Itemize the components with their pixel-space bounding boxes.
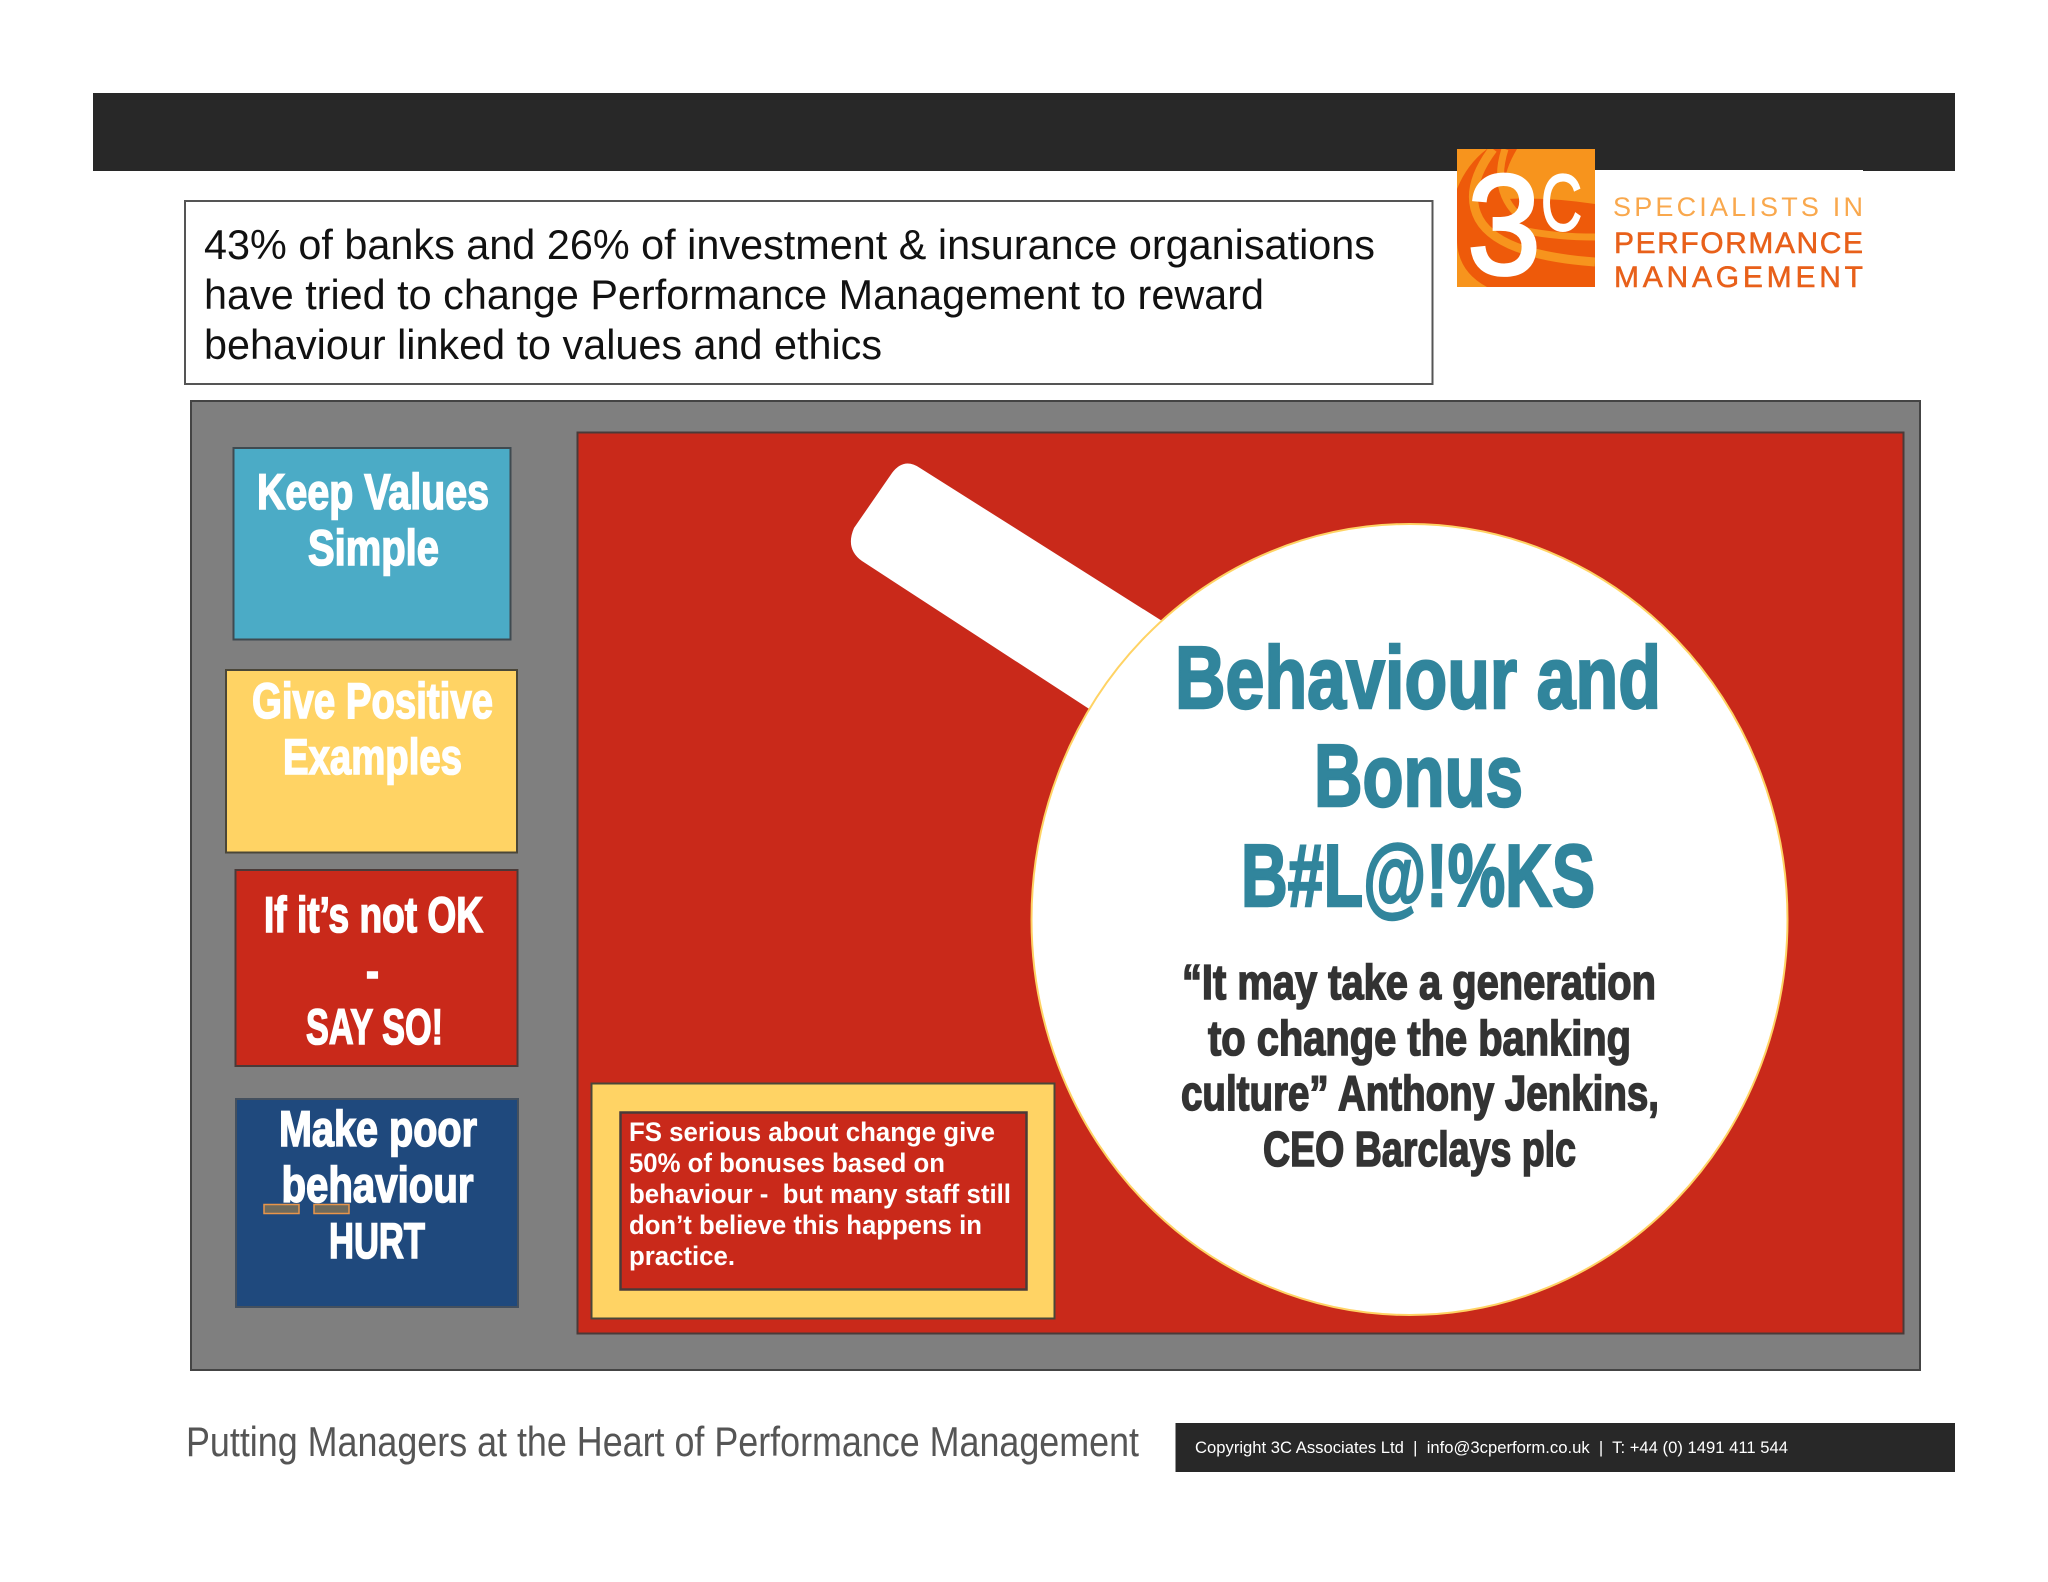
magnifying glass <box>851 464 1788 1315</box>
footer contact bar <box>1176 1423 1955 1472</box>
callout: red inner box: 50% of bonuses based on <box>629 1148 945 1178</box>
panel: grey background <box>191 401 1920 1370</box>
card: make poor behaviour hurt <box>236 1099 518 1307</box>
main title <box>1175 628 1661 925</box>
logo mark <box>1457 149 1595 287</box>
headline text box <box>185 201 1432 384</box>
callout: red inner box <box>620 1112 1026 1290</box>
headline text box: have tried to change Performance Management to reward <box>204 271 1264 318</box>
magnifier handle <box>851 464 1170 716</box>
quote: “It may take a generation <box>1182 956 1656 1010</box>
logo wordmark: SPECIALISTS IN <box>1613 192 1863 222</box>
headline text box: 43% of banks and 26% of investment & insurance organisations <box>204 221 1375 268</box>
logo: 3C specialists in performance management <box>1457 149 1863 288</box>
callout: yellow frame <box>592 1084 1054 1318</box>
headline text box: behaviour linked to values and ethics <box>204 321 882 368</box>
callout: red inner box: don’t believe this happens in <box>629 1210 982 1240</box>
footer contact bar: Copyright 3C Associates Ltd | info@3cperform.co.uk | T: +44 (0) 1491 411 544 <box>1195 1439 1788 1457</box>
main title: B#L@!%KS <box>1241 826 1595 925</box>
orange marker left <box>264 1204 299 1214</box>
logo mark: 3 <box>1467 146 1541 305</box>
logo wordmark: PERFORMANCE <box>1614 227 1863 260</box>
main title: Behaviour and <box>1175 628 1661 727</box>
card: make poor behaviour hurt: Make poor <box>279 1101 477 1157</box>
card: give positive examples: Give Positive <box>252 673 493 729</box>
card: keep values simple: Simple <box>308 520 439 576</box>
card: give positive examples: Examples <box>283 729 462 785</box>
card: keep values simple <box>234 448 510 640</box>
logo wordmark: MANAGEMENT <box>1614 261 1863 294</box>
magnifier lens <box>1032 524 1788 1315</box>
card: give positive examples <box>226 670 517 852</box>
quote: to change the banking <box>1208 1012 1631 1066</box>
card: make poor behaviour hurt: behaviour <box>282 1157 474 1213</box>
tagline: Putting Managers at the Heart of Performance Management <box>186 1418 1139 1465</box>
card: if it's not OK, say so <box>236 870 518 1066</box>
card: if it's not OK, say so: If it’s not OK <box>264 887 483 943</box>
header bar <box>93 93 1955 171</box>
card: keep values simple: Keep Values <box>257 464 489 520</box>
callout: red inner box: practice. <box>629 1241 735 1271</box>
card: if it's not OK, say so: SAY SO! <box>306 999 443 1055</box>
logo mark: C <box>1541 158 1582 247</box>
card: if it's not OK, say so: - <box>366 943 379 999</box>
callout: red inner box: FS serious about change give <box>629 1117 995 1147</box>
logo wordmark <box>1595 170 1863 294</box>
card: make poor behaviour hurt: HURT <box>329 1213 425 1269</box>
callout: red inner box: behaviour - but many staff still <box>629 1179 1011 1209</box>
panel: main red area <box>578 432 1904 1334</box>
quote: culture” Anthony Jenkins, <box>1181 1067 1659 1121</box>
main title: Bonus <box>1314 726 1523 825</box>
quote <box>1181 956 1659 1177</box>
orange marker right <box>314 1204 349 1214</box>
quote: CEO Barclays plc <box>1263 1123 1576 1177</box>
